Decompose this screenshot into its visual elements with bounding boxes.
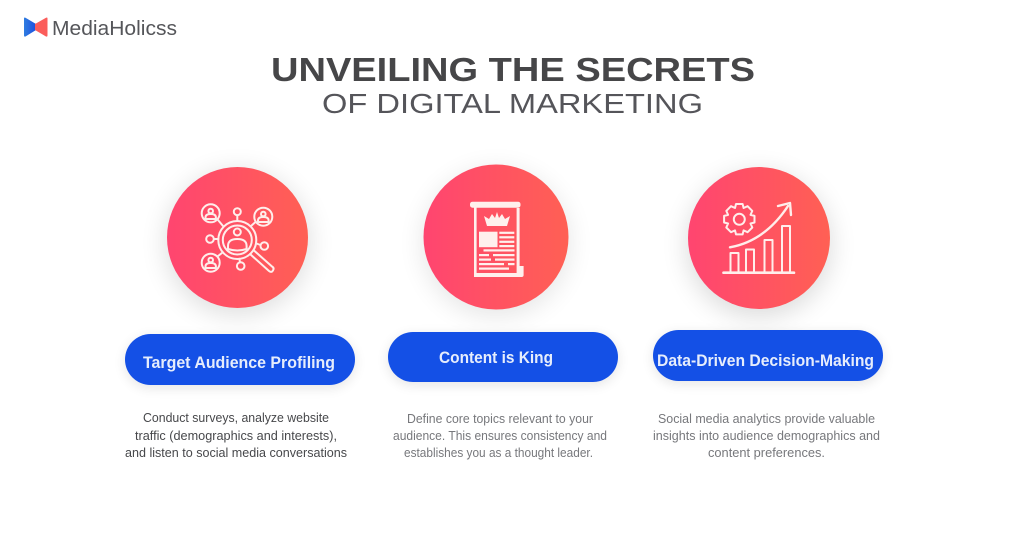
- text block: target audience description: Conduct surveys, analyze website: [143, 411, 329, 425]
- panel: data-driven decision-making: [687, 167, 831, 317]
- text block: target audience description: and listen to social media conversations: [125, 446, 347, 460]
- pill: target audience profiling: Target Audience Profiling: [143, 354, 335, 372]
- text block: analytics description: insights into audience demographics and: [653, 429, 880, 443]
- text block: target audience description: traffic (demographics and interests),: [135, 429, 337, 443]
- text block: content description: Define core topics relevant to your: [407, 412, 593, 426]
- logo wordmark: MediaHolicss: [52, 17, 177, 40]
- circle shadow: [166, 171, 310, 315]
- text block: analytics description: content preferences.: [708, 446, 825, 460]
- title: [271, 51, 755, 119]
- text block: analytics description: Social media analytics provide valuable: [658, 412, 875, 426]
- panel: target audience profiling: [166, 167, 310, 315]
- text block: target audience description: [125, 411, 347, 460]
- pill: data-driven decision-making: [653, 330, 883, 384]
- red circle: [688, 167, 830, 309]
- red circle: [167, 167, 308, 308]
- pill: content is king: [388, 332, 618, 385]
- text block: analytics description: [653, 412, 880, 460]
- icon: newspaper with crown: [470, 202, 524, 277]
- pill: data-driven decision-making: Data-Driven Decision-Making: [657, 352, 874, 370]
- text block: content description: establishes you as a thought leader.: [404, 446, 593, 460]
- circle shadow: [687, 173, 831, 317]
- icon: audience magnifier: [202, 204, 274, 272]
- red circle: [424, 164, 568, 310]
- text block: content description: audience. This ensures consistency and: [393, 429, 607, 443]
- circle shadow: [423, 170, 569, 316]
- pill: target audience profiling: [125, 334, 355, 388]
- pill: content is king: Content is King: [439, 349, 553, 367]
- logo mark: [24, 18, 48, 37]
- logo: [24, 17, 177, 40]
- title line one: UNVEILING THE SECRETS: [271, 51, 755, 88]
- title line two: OF DIGITAL MARKETING: [322, 88, 703, 119]
- panel: content is king: [423, 164, 569, 316]
- text block: content description: [393, 412, 607, 460]
- icon: gear and growth chart: [724, 203, 794, 273]
